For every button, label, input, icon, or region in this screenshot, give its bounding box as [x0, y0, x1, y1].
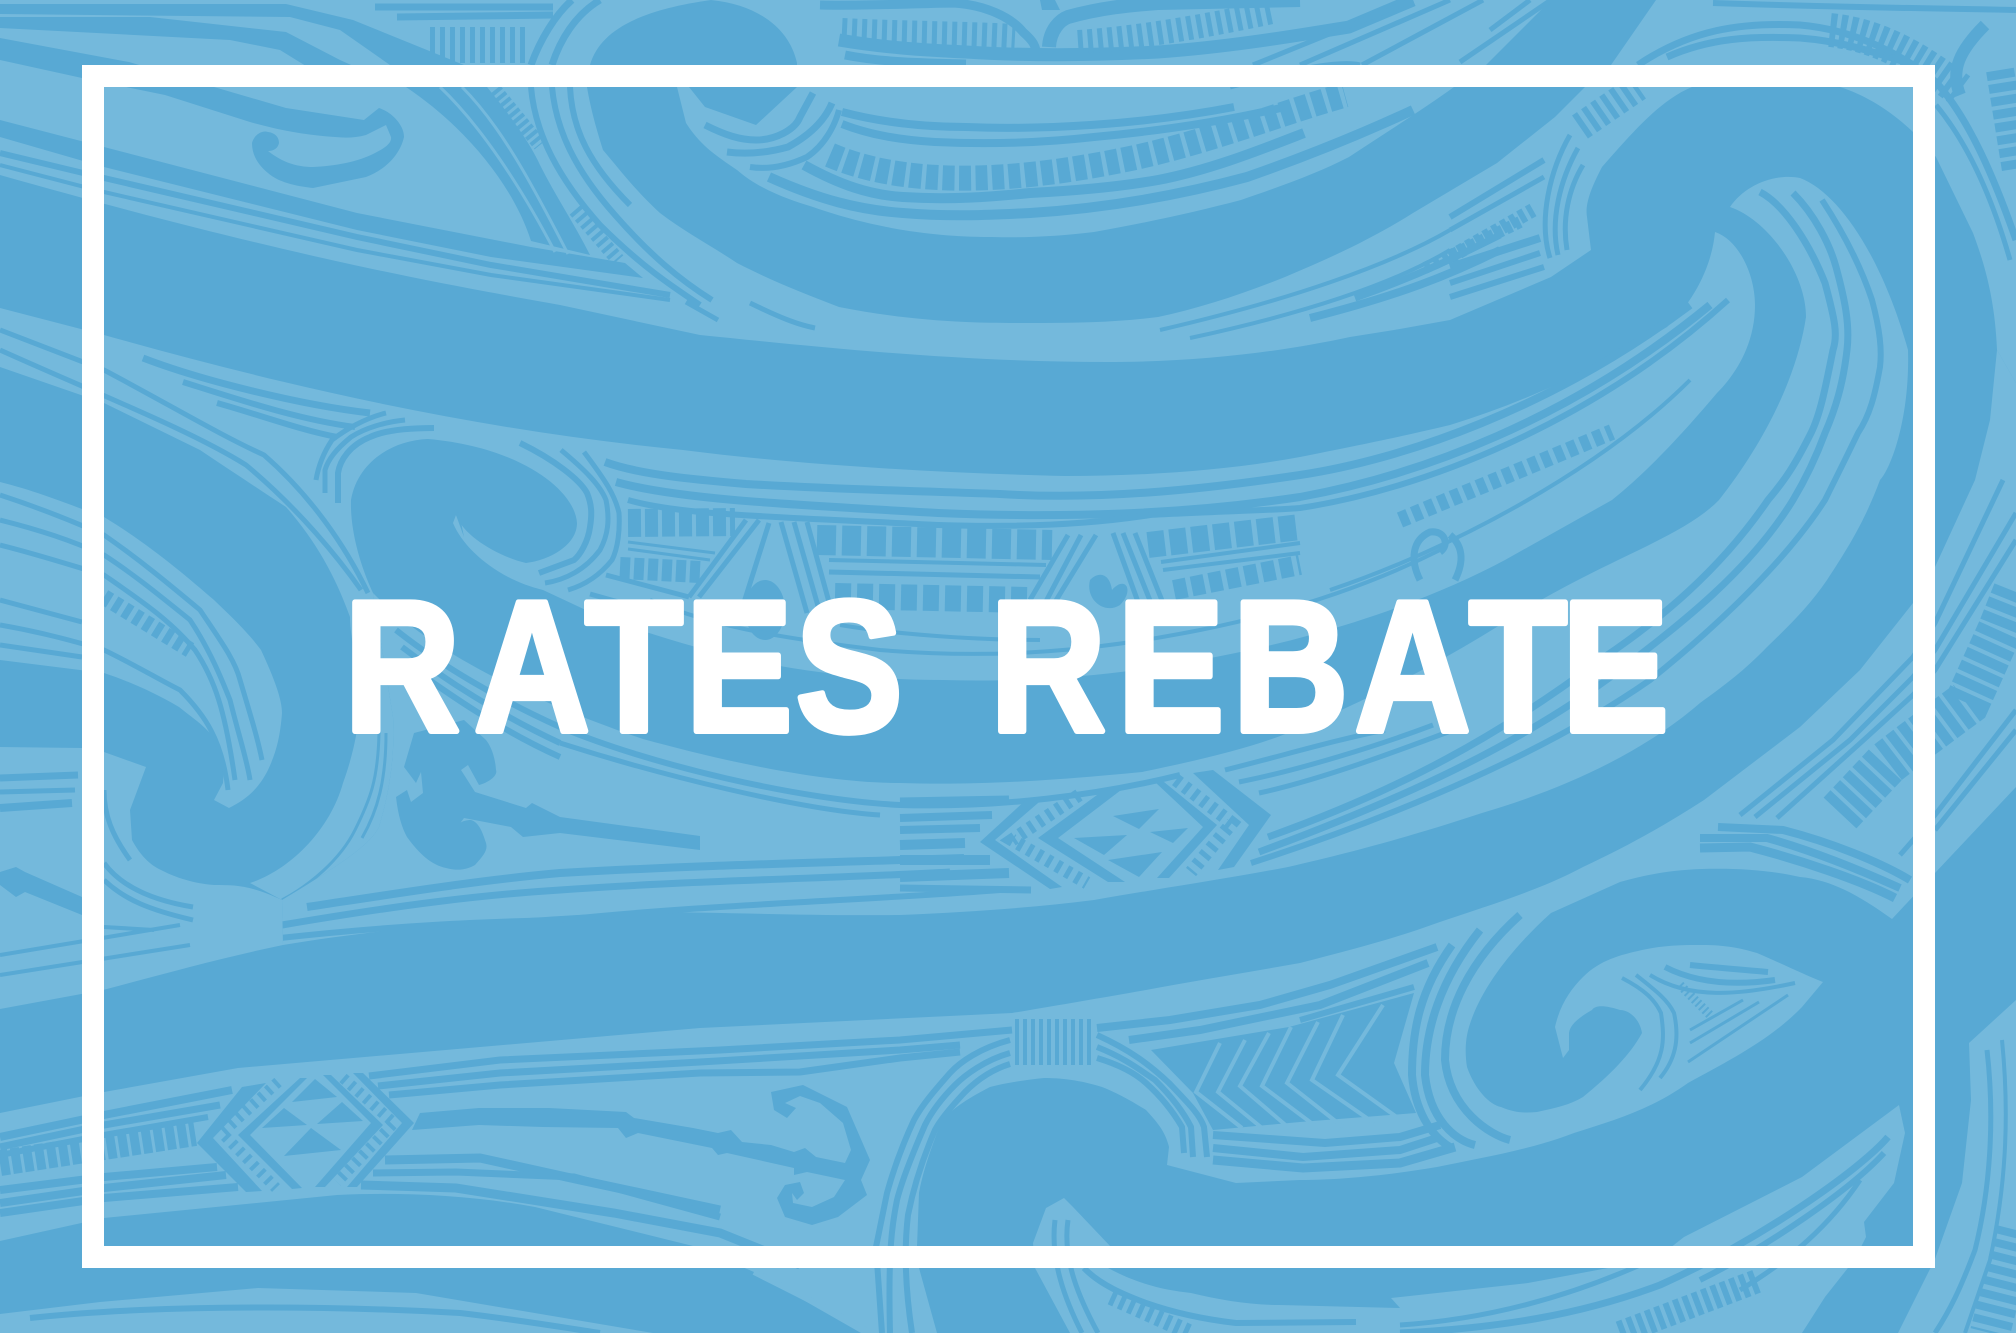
- ribbon hatching and stripes: [842, 107, 1234, 128]
- central crescent: [0, 232, 1755, 900]
- lower-left corner light area: [0, 747, 283, 1009]
- bottom-right ribbon: [1033, 1105, 1905, 1333]
- title: RATES REBATE: [344, 562, 1669, 771]
- head strips: [1268, 192, 1835, 837]
- lower koru: [412, 1085, 870, 1225]
- left leaf koru: [0, 482, 282, 808]
- stripes beneath the middle koru: [307, 858, 964, 907]
- stripes below spiral: [396, 630, 1180, 805]
- far-right ring stripes: [1638, 24, 2016, 240]
- top edge band above the frame: [820, 3, 1037, 60]
- crescent long stripes: [605, 305, 1690, 496]
- right sickle stripes: [1718, 827, 1910, 880]
- stripes under the spine: [385, 1158, 720, 1210]
- upper right ribbon shoulder hatching: [1580, 87, 1638, 127]
- lower long band and right spiral: [0, 350, 2016, 1333]
- ring knot: [198, 901, 275, 949]
- wedge stripes left of spiral: [143, 358, 370, 413]
- bottom-left sweep: [0, 1272, 870, 1333]
- centre knot: [1015, 1019, 1095, 1065]
- right head crescent and lower band: [198, 177, 1908, 945]
- upper-left hook stripe: [0, 38, 404, 188]
- long stripes: [369, 1030, 1012, 1076]
- centre diamond: [900, 770, 1271, 890]
- top ribbon and ring: [0, 0, 2016, 383]
- V fingers: [689, 520, 1167, 613]
- right spiral details: [1445, 915, 1520, 1140]
- lower-left diamond: [0, 1073, 414, 1213]
- chevron panel: [1151, 993, 1416, 1130]
- far-right lower band: [1898, 1000, 2016, 1333]
- arch bands: [876, 1040, 1010, 1333]
- chevron rows: [628, 522, 735, 523]
- lens bottom lines: [650, 550, 1440, 654]
- right ring chevrons and stripes: [1840, 590, 2016, 813]
- middle koru and spine: [396, 720, 700, 870]
- spiral arcs: [520, 443, 591, 573]
